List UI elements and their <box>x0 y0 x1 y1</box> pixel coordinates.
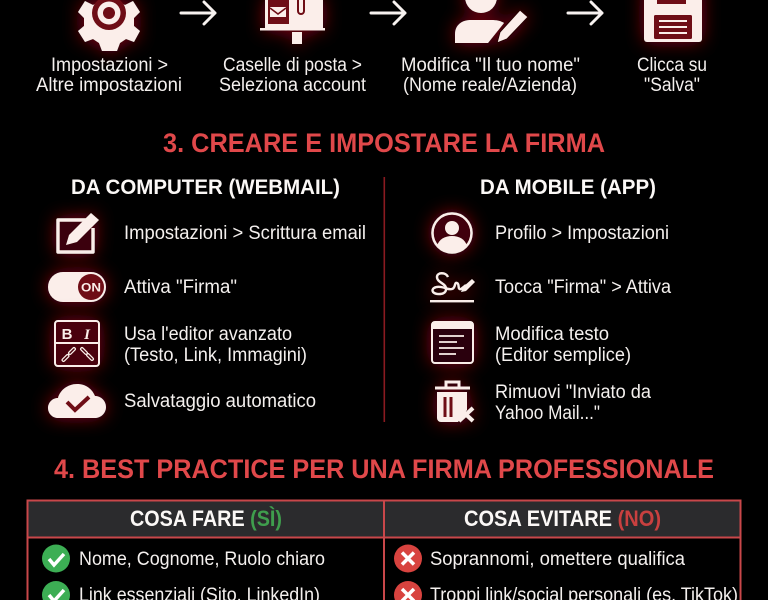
text: profilo: Profilo > Impostazioni <box>495 223 669 244</box>
text: attiva firma: Attiva "Firma" <box>124 277 237 298</box>
arrow 2 <box>371 2 405 24</box>
text: editor avanzato: (Testo, Link, Immagini) <box>124 345 307 366</box>
text: modifica testo: (Editor semplice) <box>495 345 631 366</box>
text: rimuovi inviato: Yahoo Mail..." <box>495 403 600 424</box>
arrow 1 <box>181 2 215 24</box>
icon: trash with x <box>435 382 473 422</box>
icon: floppy disk <box>644 0 702 42</box>
icon: rich editor <box>55 321 99 366</box>
cross row 1 <box>394 544 685 572</box>
text: modifica testo <box>495 324 631 366</box>
step 1 label: Impostazioni > <box>51 55 168 76</box>
text: salvataggio: Salvataggio automatico <box>124 391 316 412</box>
step 2 label: Caselle di posta > <box>223 55 362 76</box>
icon: toggle on <box>48 272 106 302</box>
table: best practice <box>27 500 741 600</box>
icon: signature <box>430 273 475 302</box>
step 4 label: Clicca su <box>637 55 707 76</box>
text: rimuovi inviato <box>495 382 651 424</box>
step 3 label: (Nome reale/Azienda) <box>403 75 577 96</box>
icon: mailbox <box>260 0 325 44</box>
step 3 label: Modifica "Il tuo nome" <box>401 55 580 76</box>
icon: rich editor: I <box>83 327 91 343</box>
step 2 label: Seleziona account <box>219 75 367 96</box>
step 2 label <box>219 55 367 96</box>
subheading: computer: DA COMPUTER (WEBMAIL) <box>71 176 340 199</box>
heading: section 3: 3. CREARE E IMPOSTARE LA FIRMA <box>163 128 605 158</box>
text: tocca firma: Tocca "Firma" > Attiva <box>495 277 671 298</box>
icon: toggle on: ON <box>81 280 101 294</box>
step 1 label <box>36 55 182 96</box>
text: editor avanzato <box>124 324 307 366</box>
cross row 2 <box>394 581 738 600</box>
text: rimuovi inviato: Rimuovi "Inviato da <box>495 382 651 403</box>
arrow 3 <box>568 2 602 24</box>
column divider <box>384 177 385 422</box>
step 4 label: "Salva" <box>644 75 700 96</box>
check row 1: Nome, Cognome, Ruolo chiaro <box>79 549 325 570</box>
check row 1 <box>42 544 325 572</box>
icon: gear <box>78 0 140 51</box>
icon: rich editor: B <box>62 326 73 343</box>
check row 2 <box>42 581 320 600</box>
heading: section 4: 4. BEST PRACTICE PER UNA FIRMA PROFESSIONALE <box>54 454 714 484</box>
step 1 label: Altre impostazioni <box>36 75 182 96</box>
text: impostazioni scrittura: Impostazioni > Scrittura email <box>124 223 366 244</box>
icon: text window <box>432 322 473 363</box>
icon: cloud check <box>48 384 106 418</box>
step 3 label <box>401 55 580 96</box>
step 4 label <box>637 55 707 96</box>
text: modifica testo: Modifica testo <box>495 324 609 345</box>
cross row 1: Soprannomi, omettere qualifica <box>430 549 685 570</box>
header: cosa fare: COSA FARE (SÌ) <box>130 506 282 531</box>
text: editor avanzato: Usa l'editor avanzato <box>124 324 292 345</box>
subheading: mobile: DA MOBILE (APP) <box>480 176 656 199</box>
header: cosa evitare: COSA EVITARE (NO) <box>464 506 661 531</box>
icon: person with pencil <box>455 0 528 43</box>
icon: profile circle <box>432 214 472 252</box>
icon: edit square <box>58 213 99 252</box>
